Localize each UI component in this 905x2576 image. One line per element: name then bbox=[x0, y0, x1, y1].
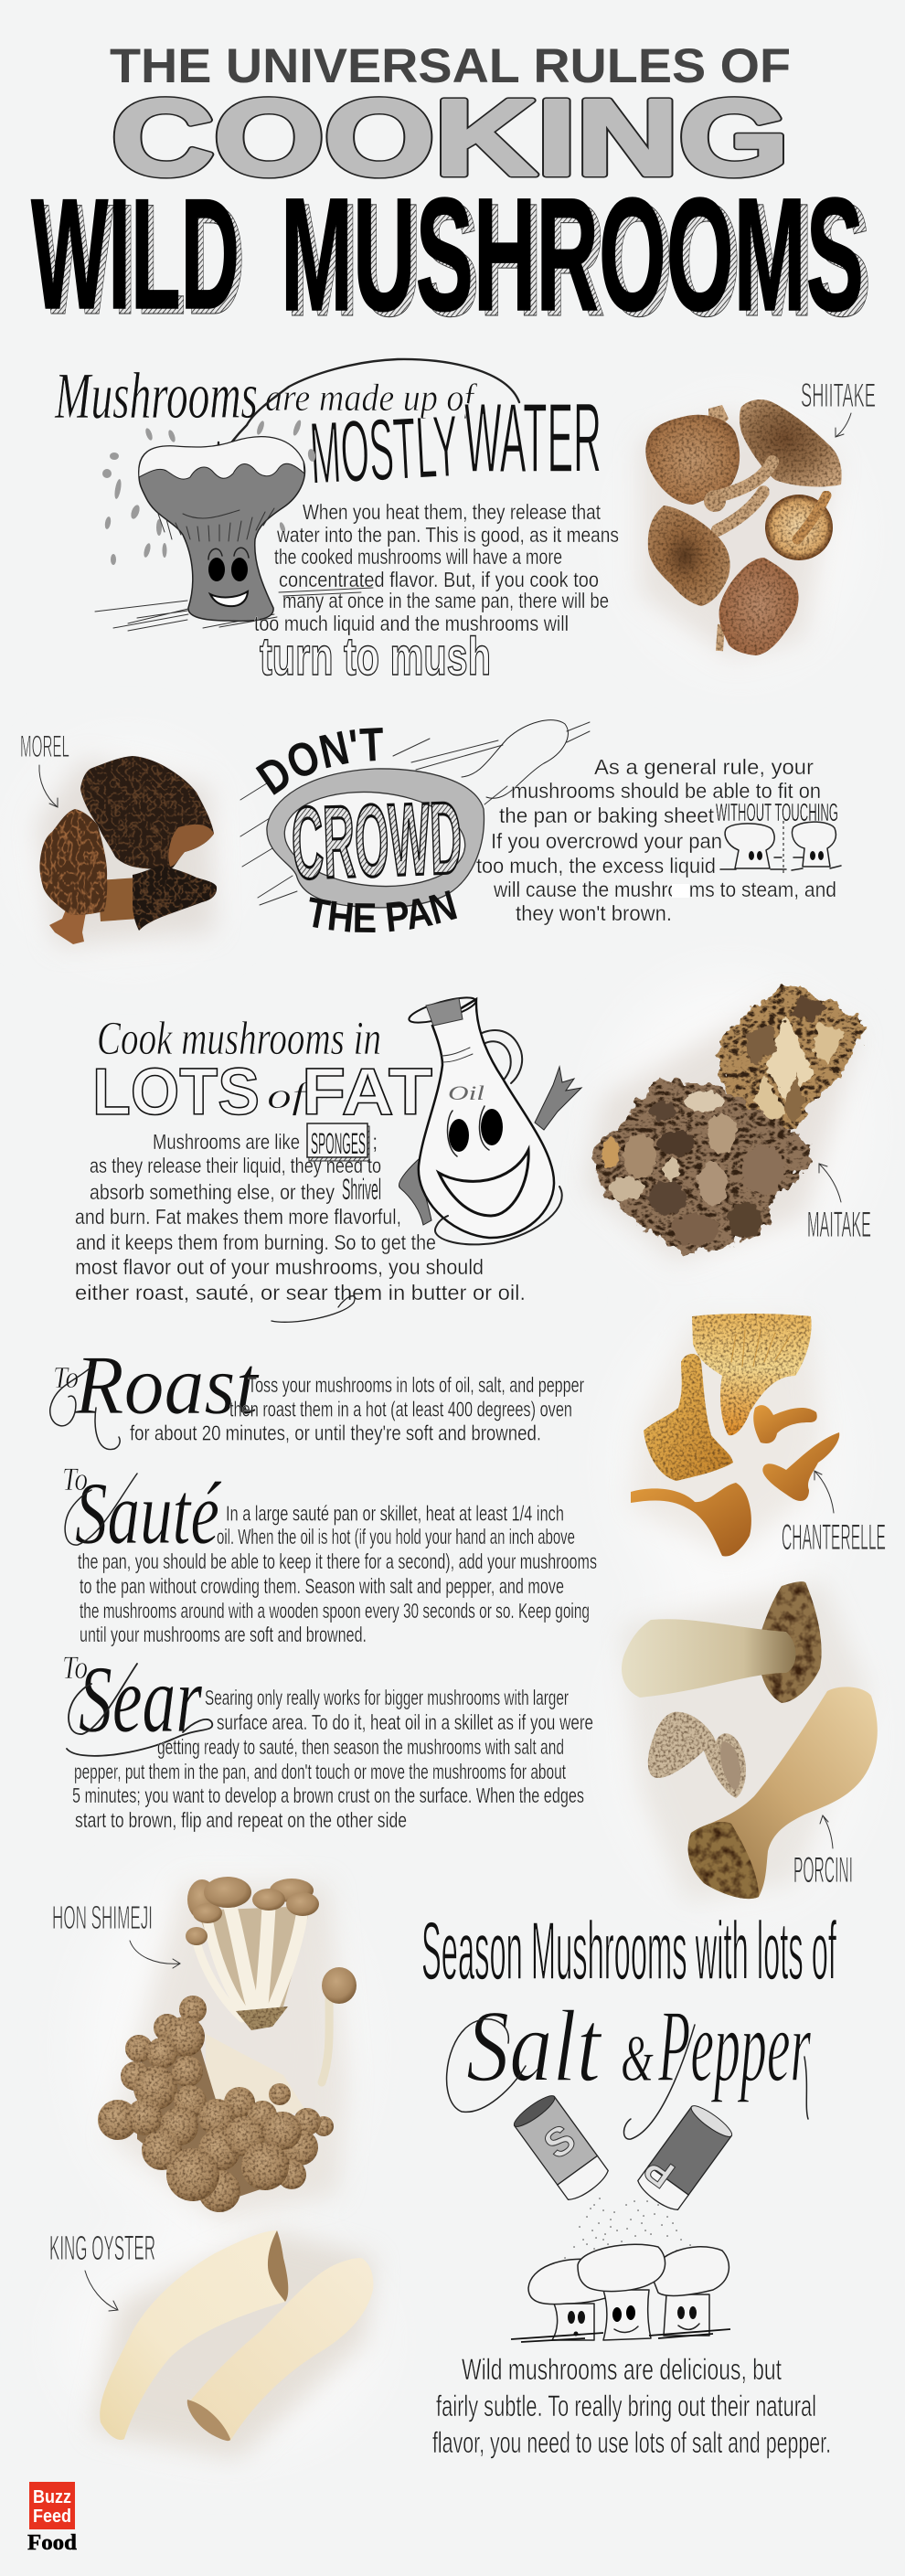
mushroom: upper bunch base bbox=[236, 2007, 288, 2030]
panel: to saute bbox=[62, 1461, 597, 1646]
text block: when you heat them: the cooked mushrooms will have a more bbox=[274, 545, 562, 569]
mushroom: upper cluster bbox=[716, 985, 868, 1131]
mushroom: top right cap bbox=[704, 399, 842, 512]
text block: general rule: too much, the excess liquid bbox=[476, 854, 716, 878]
heading: to saute: Sauté bbox=[75, 1464, 222, 1563]
text block: when you heat them bbox=[254, 500, 619, 635]
text block: sponges bbox=[75, 1130, 526, 1322]
illustration: two mushrooms without touching bbox=[720, 821, 841, 876]
text block: sponges: either roast, sauté, or sear them in butter or oil. bbox=[75, 1281, 526, 1304]
mushroom: large top chanterelle bbox=[692, 1314, 812, 1435]
mushroom: large porcini bbox=[688, 1687, 878, 1899]
text block: when you heat them: When you heat them, they release that bbox=[303, 500, 601, 524]
title line: wild mushrooms shadow bbox=[37, 171, 871, 350]
text block: saute: until your mushrooms are soft and browned. bbox=[80, 1623, 367, 1646]
mushroom: right king oyster bbox=[187, 2258, 373, 2441]
heading: salt and pepper: & bbox=[621, 2022, 654, 2095]
photo: porcini bbox=[622, 1581, 878, 1901]
mushroom: small broken porcini bbox=[648, 1712, 746, 1798]
mushroom: lower bunch caps bbox=[98, 1996, 334, 2212]
soft shadow bbox=[91, 2230, 375, 2459]
title line: the universal rules of: THE UNIVERSAL RULES OF bbox=[110, 39, 791, 93]
title line: cooking: COOKING bbox=[112, 78, 789, 198]
heading: mushrooms are made up of: Mushrooms bbox=[54, 359, 258, 432]
mushroom: lower cluster bbox=[591, 1076, 814, 1254]
panel: don't crowd the pan bbox=[240, 719, 842, 932]
arrow: arc to mushroom bbox=[218, 359, 519, 462]
mushroom: small middle chanterelle bbox=[753, 1405, 817, 1443]
icon: salt shaker: S bbox=[536, 2116, 584, 2168]
illustration: pan handle bbox=[462, 720, 568, 798]
panel: mostly water bbox=[54, 359, 619, 687]
heading: to sear bbox=[62, 1645, 212, 1756]
arrow bbox=[85, 2271, 118, 2311]
label: porcini bbox=[793, 1815, 853, 1890]
photo: maitake bbox=[585, 985, 868, 1261]
text block: sponges: and burn. Fat makes them more flavorful, bbox=[75, 1205, 401, 1229]
text block: general rule: mushrooms should be able to fit on bbox=[511, 779, 821, 803]
illustration: motion lines bbox=[240, 722, 590, 905]
heading: cook mushrooms in: Cook mushrooms in bbox=[97, 1013, 381, 1065]
text block: saute: In a large sauté pan or skillet, heat at least 1/4 inch bbox=[226, 1501, 564, 1525]
text block: sear: surface area. To do it, heat oil in a skillet as if you were bbox=[217, 1710, 593, 1734]
label: shiitake bbox=[801, 377, 876, 437]
icon: pepper shaker: P bbox=[636, 2147, 682, 2197]
icon: salt shaker bbox=[511, 2092, 612, 2204]
gills bbox=[731, 1330, 790, 1367]
text block: sear: Searing only really works for bigger mushrooms with larger bbox=[205, 1686, 569, 1709]
text block: sponges: Shrivel bbox=[342, 1173, 381, 1206]
arrow bbox=[820, 1815, 833, 1848]
heading: lots of fat: of bbox=[267, 1075, 312, 1116]
text: WATER bbox=[464, 382, 602, 493]
illustration: oil bottle character bbox=[399, 993, 581, 1244]
label: king oyster bbox=[49, 2230, 155, 2311]
text block: general rule: will cause the mushrooms to steam, and bbox=[493, 878, 836, 901]
panel: don't crowd the pan: CROWD bbox=[290, 781, 463, 900]
mushroom: right chanterelle bbox=[762, 1432, 839, 1501]
text block: when you heat them: many at once in the same pan, there will be bbox=[282, 589, 609, 612]
heading: lots of fat: LOTS bbox=[92, 1056, 260, 1129]
text block: sear: 5 minutes; you want to develop a brown crust on the surface. When the edges bbox=[72, 1783, 584, 1807]
text block: roast bbox=[130, 1373, 584, 1444]
icon: water droplets bbox=[102, 420, 316, 565]
text block: when you heat them: concentrated flavor. But, if you cook too bbox=[279, 568, 599, 591]
soft shadow bbox=[585, 996, 859, 1261]
text block: sponges: and it keeps them from burning. So to get the bbox=[76, 1230, 436, 1254]
illustration: falling salt and pepper bbox=[539, 2198, 719, 2285]
soft shadow bbox=[110, 1883, 347, 2221]
mushroom: lower bunch backing bbox=[137, 2020, 311, 2203]
illustration: oil bottle character: Oil bbox=[448, 1081, 484, 1104]
title line: wild mushrooms shadow: WILD bbox=[37, 172, 245, 347]
text block: general rule bbox=[476, 755, 838, 925]
text block: general rule: the pan or baking sheet bbox=[499, 804, 715, 827]
mushroom: left king oyster bbox=[100, 2230, 288, 2440]
illustration: pan interior bbox=[281, 785, 469, 893]
mushroom: upper bunch backing bbox=[197, 1906, 311, 2020]
text block: sear: getting ready to sauté, then season the mushrooms with salt and bbox=[157, 1735, 564, 1759]
heading: lots of fat: FAT bbox=[302, 1056, 432, 1129]
mushroom: lower bunch stems bbox=[206, 2034, 306, 2121]
arrow bbox=[836, 413, 851, 437]
soft shadow bbox=[640, 411, 836, 658]
panel: cook mushrooms in lots of fat: SPONGES bbox=[311, 1127, 366, 1160]
upper cluster petals bbox=[745, 996, 846, 1126]
label: maitake bbox=[807, 1164, 871, 1245]
title bbox=[31, 39, 871, 350]
heading: salt and pepper: Salt bbox=[466, 1990, 602, 2103]
photo: morel mushrooms bbox=[37, 756, 217, 946]
cut end bbox=[187, 2400, 230, 2441]
soft shadow bbox=[37, 759, 215, 946]
logo: buzzfeed food bbox=[27, 2482, 78, 2555]
text block: saute: oil. When the oil is hot (if you hold your hand an inch above bbox=[217, 1525, 575, 1549]
text block: sponges: Mushrooms are like bbox=[153, 1130, 300, 1154]
label: hon shimeji bbox=[52, 1899, 180, 1968]
mushroom: top left cap bbox=[645, 405, 740, 505]
title line: wild mushrooms bbox=[31, 165, 864, 345]
mushroom: tan lower morel bbox=[39, 809, 107, 915]
text block: general rule: If you overcrowd your pan bbox=[491, 829, 722, 853]
text block: roast: then roast them in a hot (at least 400 degrees) oven bbox=[229, 1397, 572, 1421]
text: KING OYSTER bbox=[49, 2230, 155, 2268]
text block: roast: for about 20 minutes, or until they're soft and browned. bbox=[130, 1421, 541, 1444]
heading: mushrooms are made up of: are made up of bbox=[265, 378, 478, 420]
mushroom: dark upper morel bbox=[80, 756, 214, 869]
panel: cook mushrooms in lots of fat bbox=[75, 993, 581, 1322]
heading: to sear: Sear bbox=[79, 1645, 203, 1752]
arrow bbox=[39, 765, 58, 807]
text block: when you heat them: too much liquid and the mushrooms will bbox=[254, 612, 569, 635]
heading: salt and pepper bbox=[447, 1990, 811, 2139]
text block: sponges: absorb something else, or they bbox=[90, 1180, 335, 1204]
text block: sear: pepper, put them in the pan, and don't touch or move the mushrooms for about bbox=[74, 1760, 566, 1783]
white glow behind photos bbox=[27, 407, 859, 2450]
white patch over text bbox=[672, 884, 689, 898]
heading: to sear: To bbox=[62, 1649, 88, 1686]
heading: to saute bbox=[62, 1461, 222, 1563]
label: chanterelle bbox=[782, 1471, 886, 1558]
mushroom: bottom right cap bbox=[719, 558, 799, 655]
mushroom: single stem bbox=[322, 1967, 357, 2082]
illustration: ground lines bbox=[95, 601, 277, 631]
illustration: pan bbox=[267, 769, 484, 908]
text block: saute: the mushrooms around with a wooden spoon every 30 seconds or so. Keep going bbox=[80, 1599, 590, 1623]
text block: sear: start to brown, flip and repeat on the other side bbox=[75, 1808, 407, 1832]
text block: saute: to the pan without crowding them. Season with salt and pepper, and move bbox=[80, 1574, 564, 1598]
heading: mostly water: MOSTLY bbox=[307, 398, 461, 503]
label: morel bbox=[20, 729, 69, 807]
mushroom: top porcini cap bbox=[757, 1581, 822, 1703]
heading: to roast: Roast bbox=[74, 1338, 260, 1432]
title line: wild mushrooms: WILD bbox=[31, 166, 240, 342]
text block: general rule: they won't brown. bbox=[516, 901, 672, 925]
label: hon shimeji: HON SHIMEJI bbox=[52, 1899, 153, 1936]
logo: red badge: Feed bbox=[33, 2507, 71, 2527]
mushroom: left chanterelle bbox=[644, 1354, 733, 1481]
heading: to saute: To bbox=[62, 1461, 88, 1497]
heading: lots of fat bbox=[92, 1056, 432, 1129]
text block: sponges: ; bbox=[372, 1130, 378, 1154]
lower cluster petals bbox=[602, 1091, 785, 1246]
heading: to roast: To bbox=[53, 1361, 79, 1395]
text block: when you heat them: water into the pan. This is good, as it means bbox=[276, 523, 619, 547]
soft shadow bbox=[622, 1581, 868, 1901]
text block: saute bbox=[78, 1501, 597, 1646]
soft shadow bbox=[631, 1321, 823, 1554]
arrow bbox=[814, 1471, 834, 1513]
photo: hon shimeji bbox=[98, 1877, 357, 2221]
panel: to roast bbox=[50, 1338, 584, 1450]
photo: king oyster bbox=[91, 2230, 375, 2459]
photo: chanterelles bbox=[631, 1314, 839, 1557]
text block: general rule: As a general rule, your bbox=[594, 755, 814, 779]
mushroom: tan lower morel stem bbox=[98, 878, 139, 921]
logo: red badge bbox=[29, 2482, 75, 2529]
mushroom: upper morel rim bbox=[168, 825, 214, 867]
mushroom: small underside bbox=[765, 495, 833, 560]
text block: sponges: as they release their liquid, they need to bbox=[90, 1154, 381, 1177]
panel: season with salt and pepper bbox=[421, 1906, 836, 2459]
logo: red badge: Buzz bbox=[33, 2487, 71, 2507]
text block: wild mushrooms are delicious: Wild mushrooms are delicious, but bbox=[462, 2353, 782, 2386]
title line: cooking: COOKING bbox=[112, 78, 789, 198]
text block: sponges: most flavor out of your mushrooms, you should bbox=[75, 1255, 484, 1279]
heading: the pan: THE PAN bbox=[309, 890, 457, 932]
mushroom: top porcini stem bbox=[622, 1619, 796, 1698]
porcini base bbox=[688, 1822, 759, 1899]
illustration: three mushroom characters bbox=[511, 2244, 730, 2342]
panel: to sear bbox=[62, 1645, 593, 1832]
text block: sear bbox=[72, 1686, 593, 1832]
heading: don't: DON'T bbox=[256, 728, 383, 795]
arrow bbox=[130, 1941, 180, 1968]
logo: food wordmark: Food bbox=[27, 2531, 78, 2555]
mushroom: upper bunch stems bbox=[197, 1897, 303, 2018]
arrow bbox=[819, 1164, 841, 1202]
text block: saute: the pan, you should be able to keep it there for a second), add your mushrooms bbox=[78, 1549, 597, 1573]
text: MOREL bbox=[20, 729, 69, 764]
callout: turn to mush: turn to mush bbox=[260, 627, 491, 687]
callout: sponges bbox=[307, 1123, 369, 1161]
text block: wild mushrooms are delicious bbox=[432, 2353, 831, 2459]
mushroom: bottom chanterelle bbox=[631, 1483, 751, 1557]
icon: pepper shaker bbox=[634, 2101, 735, 2214]
mushroom: upper bunch caps bbox=[186, 1877, 319, 1945]
cut end bbox=[268, 2230, 288, 2302]
illustration: water-filled mushroom character bbox=[139, 437, 304, 621]
mushroom: bottom left cap bbox=[648, 492, 763, 606]
mushroom: dark right morel bbox=[133, 866, 217, 931]
text block: roast: Toss your mushrooms in lots of oil, salt, and pepper bbox=[248, 1373, 584, 1397]
photo: shiitake mushrooms bbox=[640, 399, 842, 658]
